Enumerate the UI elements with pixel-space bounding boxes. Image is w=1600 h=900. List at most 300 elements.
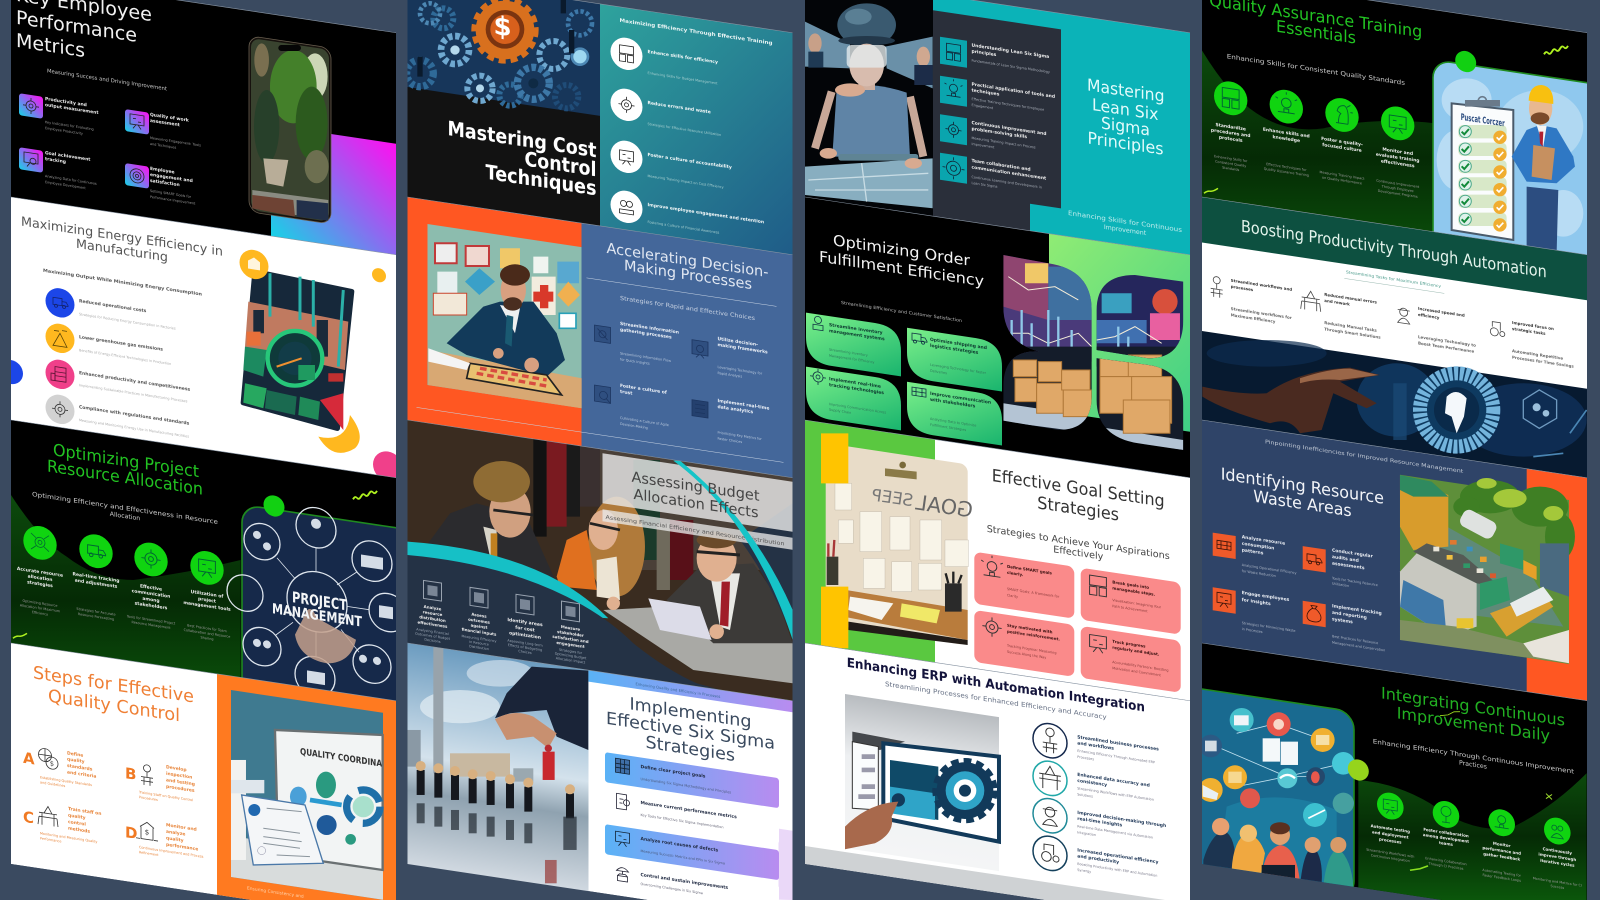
step B bbox=[126, 764, 195, 802]
step: collaboration: Foster collaboration bbox=[1423, 827, 1469, 838]
item: workflows: processes bbox=[1231, 284, 1254, 292]
slide: Maximizing Energy Efficiency bbox=[0, 195, 403, 484]
card: track progress: Track progress bbox=[1112, 639, 1146, 649]
column: measure: Allocation Impact bbox=[556, 656, 586, 665]
project management photo: MANAGEMENT bbox=[272, 601, 362, 631]
title: Mastering Cost bbox=[447, 116, 597, 162]
column: assess: financial inputs bbox=[462, 627, 497, 637]
item: culture of trust: Cultivating a Culture of Agile bbox=[620, 416, 669, 427]
card: shipping: Leveraging Technology for Faster bbox=[930, 363, 987, 375]
item: productivity: Enhanced productivity and competitiveness bbox=[79, 370, 190, 393]
card: track progress: regularly and adjust. bbox=[1112, 645, 1160, 657]
step A: Establishing Quality Standards bbox=[40, 775, 92, 787]
subtitle: Measuring Success and Driving Improvement bbox=[47, 68, 167, 92]
item: audits: Tools for Tracking Resource bbox=[1331, 576, 1378, 587]
slide: Boosting Productivity Through Automation bbox=[1202, 197, 1587, 514]
item: reduced costs: Strategies for Reducing Energy Consumption in Factories bbox=[79, 312, 176, 331]
subtitle bbox=[1068, 210, 1182, 243]
item: workflows: Streamlining workflows for bbox=[1231, 306, 1292, 320]
card: communication: Analyzing Data to Optimize bbox=[930, 417, 976, 428]
slide: Mastering Cost Control Techniques bbox=[407, 0, 793, 256]
column: assess bbox=[461, 586, 497, 652]
step C: Train staff on bbox=[68, 806, 101, 817]
subtitle: Effectively bbox=[1053, 544, 1104, 563]
item: goal achievement bbox=[19, 146, 97, 192]
item: tracking: Implement tracking bbox=[1332, 603, 1382, 617]
item: strategic focus: strategic tasks bbox=[1512, 326, 1546, 336]
item: reduced errors bbox=[1301, 288, 1381, 340]
step: accurate resource: Accurate resource bbox=[17, 566, 63, 579]
title: Metrics bbox=[16, 29, 85, 62]
item: productivity: output measurement bbox=[45, 102, 99, 116]
green wave bbox=[1358, 773, 1587, 900]
column: measure bbox=[552, 600, 589, 665]
item: consumption: patterns bbox=[1242, 547, 1264, 557]
card: inventory: Streamline inventory bbox=[829, 322, 883, 336]
item: consumption: consumption bbox=[1242, 541, 1274, 552]
step: quality culture: on Quality Performance bbox=[1322, 176, 1362, 185]
step: standardize: protocols bbox=[1219, 135, 1243, 144]
item: collaboration: Continuous Learning and Development in bbox=[972, 175, 1042, 190]
card: measure performance bbox=[605, 788, 779, 844]
card: control improvements bbox=[605, 861, 779, 900]
title: Performance bbox=[16, 6, 137, 47]
column: identify: Assessing Long-term bbox=[507, 638, 543, 648]
step: effective communication: Effective bbox=[140, 583, 162, 593]
step: real-time tracking: Resource Forecasting bbox=[78, 612, 114, 621]
digital hand photo bbox=[1202, 282, 1587, 514]
item: employee engagement: engagement and bbox=[150, 172, 193, 184]
step: real-time tracking: Strategies for Accurate bbox=[76, 607, 116, 617]
item: engage employees: Engage employees bbox=[1242, 590, 1290, 603]
column: assess: Assess bbox=[471, 612, 487, 619]
subtitle: Enhancing Efficiency Through Continuous Improvement bbox=[1373, 738, 1575, 776]
item: employee engagement: Performance Improvement bbox=[150, 195, 196, 206]
step D: Refinement bbox=[139, 850, 159, 857]
decorative circles bbox=[11, 268, 396, 478]
step: accurate resource: Allocation for Maximum bbox=[20, 603, 61, 613]
item: decision-making: Improved decision-making through bbox=[1077, 810, 1166, 829]
card: root causes bbox=[605, 824, 779, 880]
step: monitor performance: Faster Feedback Loops bbox=[1482, 873, 1521, 883]
item: streamline: for Quick Insights bbox=[620, 357, 650, 366]
item: greenhouse bbox=[46, 324, 171, 365]
item: streamlined processes: Processes bbox=[1077, 755, 1094, 761]
title: Manufacturing bbox=[76, 237, 168, 266]
title: Waste Areas bbox=[1253, 487, 1352, 520]
title: Boosting Productivity Through Automation bbox=[1241, 217, 1547, 281]
item: engagement: Fostering a Culture of Financial Awareness bbox=[648, 220, 720, 235]
item: practical: Effective Training Techniques for Employee bbox=[972, 97, 1044, 112]
certificate photo: QUALITY COORDINA bbox=[300, 747, 382, 770]
step: quality culture: Measuring Training Impact bbox=[1320, 170, 1365, 181]
title: Optimizing Order bbox=[833, 231, 971, 270]
item: operational efficiency: Synergy bbox=[1077, 868, 1091, 874]
item: reduce errors: Reduce errors and waste bbox=[648, 100, 711, 115]
slide: Optimizing Order Fulfillment Efficiency bbox=[805, 188, 1195, 483]
title bbox=[1087, 75, 1164, 159]
item: understanding: Understanding Lean Six Sigma bbox=[972, 42, 1049, 60]
column: analyze: Analyzing Financial bbox=[416, 627, 449, 636]
gauge illustration bbox=[243, 272, 352, 430]
item: real-time analytics: Implement real-time bbox=[718, 398, 769, 412]
slide: Accelerating Decision-Making Processes bbox=[408, 197, 792, 478]
item: reduce errors: Strategies for Effective Resource Utilization bbox=[648, 122, 721, 137]
card: control improvements: Control and sustain improvements bbox=[640, 872, 728, 891]
column: identify: Identify areas bbox=[507, 617, 543, 628]
card: communication: Fulfillment Strategies bbox=[930, 423, 966, 432]
item: reduce errors bbox=[610, 86, 721, 137]
step D: Continuous Improvement and Process bbox=[139, 845, 204, 859]
item: accountability bbox=[610, 138, 732, 191]
title bbox=[606, 691, 775, 772]
item: streamline: Streamline information bbox=[620, 321, 679, 336]
step: monitor training bbox=[1376, 103, 1420, 199]
item: compliance: Measuring and Monitoring Energy Use in Manufacturing Facilities bbox=[79, 418, 189, 439]
step: standardize: Standardize bbox=[1215, 122, 1246, 133]
touchscreen gear image bbox=[845, 694, 999, 871]
step: real-time tracking bbox=[73, 531, 119, 622]
title: Quality Control bbox=[48, 687, 180, 726]
item: practical: techniques bbox=[972, 87, 1000, 98]
slide: Implementing Effective Six Sigma Strategies bbox=[407, 643, 792, 900]
step B: inspection bbox=[166, 771, 192, 781]
title: Fulfillment Efficiency bbox=[819, 248, 984, 290]
step B: procedures bbox=[166, 784, 195, 794]
item: increased speed: Increased speed and bbox=[1418, 306, 1465, 318]
item: streamline: Streamlining Information Flow bbox=[620, 351, 671, 363]
column: identify: Effects of Budgeting bbox=[508, 643, 542, 652]
item: increased speed bbox=[1398, 303, 1476, 354]
column: identify: Choices bbox=[518, 649, 532, 655]
step: real-time tracking: and adjustments bbox=[75, 578, 118, 590]
column: analyze bbox=[415, 579, 451, 645]
item: continuous improvement: Improvement bbox=[972, 142, 995, 149]
item: strategic focus: Processes for Time Savings bbox=[1512, 355, 1574, 369]
step: monitor performance: gather feedback bbox=[1483, 851, 1521, 862]
subtitle: Strategies for Rapid and Effective Choices bbox=[620, 296, 755, 322]
item: enhance skills bbox=[610, 35, 718, 86]
item: consumption: Analyze resource bbox=[1242, 534, 1285, 547]
subtitle strip: Assessing Financial Efficiency and Resource Distribution bbox=[606, 515, 784, 548]
slide: Enhancing ERP with Automation Integration bbox=[805, 643, 1190, 900]
subtitle: Allocation bbox=[110, 511, 140, 522]
title bbox=[819, 229, 984, 290]
step A: quality bbox=[67, 756, 85, 765]
card: motivated: Stay motivated with bbox=[1007, 623, 1053, 635]
item: real-time analytics: data analytics bbox=[718, 404, 754, 415]
title: Effective Goal Setting bbox=[992, 466, 1165, 512]
subtitle: Enhancing Skills for Consistent Quality Standards bbox=[1227, 53, 1405, 87]
item: employee engagement: satisfaction bbox=[150, 178, 180, 188]
item: quality of work bbox=[125, 110, 201, 149]
step: accurate resource: Optimizing Resource bbox=[23, 599, 57, 608]
step: enhance skills: Enhance skills and bbox=[1263, 127, 1310, 140]
item: compliance bbox=[46, 394, 190, 438]
item: decision-making: Real-time Data Management via Automation bbox=[1077, 824, 1153, 840]
item: enhance skills: Enhancing Skills for Budget Management bbox=[648, 71, 718, 86]
slide: Steps for Effective Quality Control bbox=[11, 643, 396, 900]
item: employee engagement: Setting SMART Goals for bbox=[150, 189, 192, 199]
item: understanding: Fundamentals of Lean Six Sigma Methodology bbox=[972, 58, 1050, 74]
item: tracking: Best Practices for Resource bbox=[1332, 634, 1378, 645]
card: tracking bbox=[806, 367, 901, 430]
step: accurate resource: Efficiency bbox=[32, 610, 48, 617]
step: monitor training: Continuous Improvement bbox=[1376, 179, 1420, 189]
subtitle: Streamlining Efficiency and Customer Satisfaction bbox=[841, 300, 962, 324]
item: audits bbox=[1303, 543, 1378, 592]
card: shipping: Deliveries bbox=[930, 369, 947, 375]
top band bbox=[588, 670, 792, 712]
step: project tools bbox=[183, 548, 231, 644]
whiteboard desk photo: GOAL bbox=[914, 490, 974, 522]
item: productivity bbox=[46, 360, 190, 402]
item: consumption: for Waste Reduction bbox=[1242, 569, 1276, 578]
item: compliance: Compliance with regulations and standards bbox=[79, 404, 190, 427]
item: operational efficiency: and productivity bbox=[1077, 853, 1119, 866]
item: collaboration: communication enhancement bbox=[972, 164, 1047, 182]
card: SMART goals: clearly. bbox=[1007, 570, 1024, 577]
step: monitor performance: Monitor bbox=[1493, 841, 1510, 848]
card: motivated: Success Along the Way bbox=[1007, 650, 1046, 660]
item: reduced errors: Through Smart Solutions bbox=[1324, 326, 1381, 340]
card: measure performance: Key Tools for Effective Six Sigma Implementation bbox=[640, 813, 724, 829]
card: communication: with stakeholders bbox=[930, 397, 976, 410]
people network illustration bbox=[1182, 686, 1355, 899]
item: real-time analytics: Faster Choices bbox=[718, 437, 742, 444]
caption: Pinpointing Inefficiencies for Improved Resource Management bbox=[1265, 439, 1463, 475]
item: audits: audits and bbox=[1332, 554, 1359, 564]
item: streamline: gathering processes bbox=[620, 327, 672, 341]
step: continuously improve bbox=[1533, 814, 1582, 893]
step: project tools: Sharing bbox=[200, 635, 214, 641]
card: track progress: Motivation and Commitment bbox=[1112, 666, 1161, 677]
step: standardize: procedures and bbox=[1211, 127, 1250, 139]
item: workflows bbox=[1211, 275, 1292, 327]
card: define goals: Understanding Six Sigma Methodology and Principles bbox=[640, 777, 731, 795]
column: measure: Optimizing Budget bbox=[555, 652, 587, 660]
step: standardize: Consistent Quality bbox=[1215, 159, 1246, 168]
step: automate testing: and deployment bbox=[1372, 829, 1409, 840]
item: quality of work: Measuring Engagement: Tools bbox=[150, 136, 201, 148]
column 4 of slides bbox=[1182, 0, 1600, 900]
four-lobed chart and warehouse image bbox=[995, 247, 1195, 453]
card: inventory: management systems bbox=[829, 328, 885, 342]
step C: C bbox=[23, 808, 34, 827]
step: project tools: Collaboration and Resource bbox=[184, 628, 230, 639]
title bbox=[992, 466, 1165, 532]
item: audits: assessments bbox=[1332, 561, 1365, 571]
step: monitor performance: Automating Testing for bbox=[1482, 868, 1522, 878]
item: streamlined processes: and workflows bbox=[1077, 740, 1114, 752]
column: measure: stakeholder bbox=[557, 629, 584, 638]
column: assess: outcomes bbox=[468, 617, 491, 625]
step B: and testing bbox=[166, 777, 195, 788]
item: frameworks bbox=[692, 332, 768, 383]
subtitle bbox=[1344, 269, 1444, 293]
whiteboard desk photo bbox=[821, 410, 974, 671]
item: operational efficiency bbox=[1033, 834, 1158, 887]
step: continuously improve: Success bbox=[1550, 884, 1564, 890]
project management photo: PROJECT bbox=[292, 588, 348, 614]
title: Essentials bbox=[1276, 17, 1356, 48]
step: monitor training: effectiveness bbox=[1381, 158, 1415, 169]
item: collaboration bbox=[940, 153, 1047, 196]
card: communication: Improve communication bbox=[930, 391, 991, 406]
subtitle: Enhancing Skills for Continuous bbox=[1068, 210, 1182, 234]
card: SMART goals: Clarity bbox=[1007, 593, 1018, 599]
card: inventory bbox=[806, 313, 901, 376]
item: data accuracy: Streamlining Workflows with ERP Automation bbox=[1077, 786, 1154, 802]
title: Steps for Effective bbox=[33, 663, 194, 707]
dark list panel bbox=[933, 10, 1061, 236]
step: enhance skills: knowledge bbox=[1273, 134, 1300, 144]
item: collaboration: Lean Six Sigma bbox=[972, 181, 998, 189]
title: Strategies bbox=[1037, 493, 1119, 526]
project management photo bbox=[226, 506, 396, 700]
card: motivated: positive reinforcement. bbox=[1007, 629, 1060, 642]
item: audits: Utilization bbox=[1332, 582, 1349, 588]
step: effective communication: Tools for Streamlined Project bbox=[126, 614, 176, 626]
card: shipping: Optimize shipping and bbox=[930, 337, 987, 351]
item: strategic focus: Improved focus on bbox=[1512, 320, 1554, 331]
step: collaboration: Through CI Practices bbox=[1428, 862, 1464, 871]
item: quality of work: and Techniques bbox=[150, 142, 176, 150]
item: practical bbox=[940, 76, 1055, 120]
step A: and Guidelines bbox=[40, 780, 65, 788]
item: strategic focus: Automating Repetitive bbox=[1512, 348, 1563, 361]
step B: Develop bbox=[166, 764, 187, 773]
title: Making Processes bbox=[624, 257, 752, 293]
card: shipping: logistics strategies bbox=[930, 343, 979, 356]
step: accurate resource: allocation bbox=[28, 574, 52, 583]
card: manageable steps: manageable steps. bbox=[1112, 585, 1155, 597]
step: automate testing: processes bbox=[1379, 836, 1402, 845]
step: monitor performance: performance and bbox=[1482, 845, 1521, 856]
slide: Optimizing Project Resource Allocation bbox=[11, 420, 396, 700]
crescent bbox=[318, 415, 360, 453]
step: effective communication bbox=[126, 539, 176, 631]
column: measure: engagement bbox=[556, 640, 585, 649]
item: engage employees: Strategies for Minimizing Waste bbox=[1242, 621, 1295, 633]
card: tracking: Implement real-time bbox=[829, 376, 881, 390]
card: shipping bbox=[907, 328, 1002, 392]
title: Sigma bbox=[1101, 113, 1150, 140]
top band: Enhancing Quality and Efficiency in Processes bbox=[636, 682, 720, 699]
item: data accuracy bbox=[1033, 759, 1154, 811]
step A: standards bbox=[67, 763, 93, 773]
item: understanding: principles bbox=[972, 48, 997, 58]
card: measure performance: Measure current performance metrics bbox=[640, 800, 737, 820]
card: SMART goals: SMART Goals: A Framework for bbox=[1007, 587, 1060, 599]
column: identify: optimization bbox=[509, 630, 541, 641]
title: Integrating Continuous bbox=[1381, 683, 1565, 730]
item: tracking: Management and Conservation bbox=[1332, 641, 1385, 652]
item: culture of trust: Foster a culture of bbox=[620, 383, 667, 396]
item: operational efficiency: Boosting Productivity with ERP and Automation bbox=[1077, 862, 1157, 878]
step: automate testing: Streamlining Workflows with bbox=[1366, 848, 1414, 859]
card: motivated bbox=[974, 610, 1074, 677]
businessman photo bbox=[428, 220, 582, 431]
card: motivated: Tracking Progress: Measuring bbox=[1006, 644, 1056, 655]
item: quality of work: Quality of work bbox=[150, 112, 190, 124]
card: manageable steps: Break goals into bbox=[1112, 579, 1149, 590]
item: productivity: Employee Productivity bbox=[45, 126, 83, 136]
column: identify bbox=[507, 593, 543, 657]
subtitle: Improvement bbox=[1104, 224, 1147, 237]
step: automate testing: Continuous Integration bbox=[1371, 853, 1410, 863]
title: Techniques bbox=[486, 160, 597, 200]
step D bbox=[126, 822, 204, 858]
step: standardize: Enhancing Skills for bbox=[1214, 154, 1248, 163]
slide: Assessing Budget Allocation Effects bbox=[407, 369, 793, 768]
subtitle: Maximizing Efficiency Through Effective Training bbox=[620, 18, 773, 47]
subtitle: Practices bbox=[1459, 760, 1487, 771]
title: Control bbox=[524, 147, 596, 181]
woman with visor photo bbox=[805, 3, 933, 208]
column: analyze: Outcomes of Budget bbox=[415, 632, 451, 641]
item: productivity: Implementing Sustainable Practices in Manufacturing Processes bbox=[79, 383, 188, 403]
column 1 of slides bbox=[0, 0, 412, 900]
meeting photo bbox=[423, 427, 793, 683]
title: Improvement Daily bbox=[1397, 703, 1550, 745]
whiteboard desk photo: SEEP bbox=[870, 486, 914, 510]
slide: Key Employee Performance Metrics bbox=[11, 0, 396, 256]
subtitle bbox=[1373, 738, 1575, 784]
step: accurate resource bbox=[17, 523, 63, 619]
item: reduced costs: Reduced operational costs bbox=[79, 298, 147, 314]
step: accurate resource: strategies bbox=[27, 579, 53, 589]
item: tracking: and reporting bbox=[1332, 610, 1367, 621]
gears photo: $ bbox=[493, 11, 512, 44]
step: project tools: project bbox=[198, 596, 217, 605]
item: consumption bbox=[1213, 530, 1297, 581]
item: productivity: Productivity and bbox=[45, 96, 87, 108]
step C: control bbox=[68, 819, 86, 828]
card: track progress bbox=[1081, 626, 1181, 693]
title: Allocation Effects bbox=[634, 486, 759, 522]
card: SMART goals bbox=[974, 552, 1074, 619]
step: project tools: management tools bbox=[183, 600, 231, 613]
column: analyze: effectiveness bbox=[418, 620, 448, 629]
item: goal achievement: tracking bbox=[45, 156, 66, 165]
subtitle: Strategies to Achieve Your Aspirations bbox=[987, 524, 1170, 562]
item: reduced errors: Reduced manual errors bbox=[1324, 292, 1377, 305]
item: decision-making: Integration bbox=[1077, 830, 1096, 837]
step: quality culture bbox=[1320, 95, 1365, 186]
item: streamlined processes: Enhancing Efficiency Through Automated ERP bbox=[1077, 749, 1155, 765]
title: Resource Allocation bbox=[47, 456, 203, 499]
item: employee engagement: Employee bbox=[150, 166, 175, 176]
decorative accents bbox=[1204, 0, 1568, 248]
step: automate testing: Automate testing bbox=[1371, 823, 1410, 834]
item: increased speed: Boost Team Performance bbox=[1418, 340, 1474, 354]
gears photo bbox=[407, 0, 600, 137]
decorative ball and accents bbox=[1348, 695, 1552, 892]
step: effective communication: Resource Management bbox=[132, 620, 171, 630]
card: communication bbox=[907, 382, 1002, 446]
isometric factory image bbox=[1400, 449, 1575, 690]
column: assess: Distribution bbox=[469, 644, 489, 651]
title: Strategies bbox=[646, 733, 735, 766]
column: assess: against bbox=[471, 622, 487, 630]
item: continuous improvement: Continuous improvement and bbox=[972, 120, 1046, 137]
step: quality culture: Foster a quality- bbox=[1321, 136, 1363, 148]
title: Identifying Resource bbox=[1221, 464, 1384, 508]
subtitle: Maximizing Output While Minimizing Energy Consumption bbox=[43, 268, 202, 298]
subtitle: Streamlining Tasks for Maximum Efficiency bbox=[1346, 269, 1442, 289]
item: accountability: Foster a culture of accountability bbox=[648, 152, 732, 171]
